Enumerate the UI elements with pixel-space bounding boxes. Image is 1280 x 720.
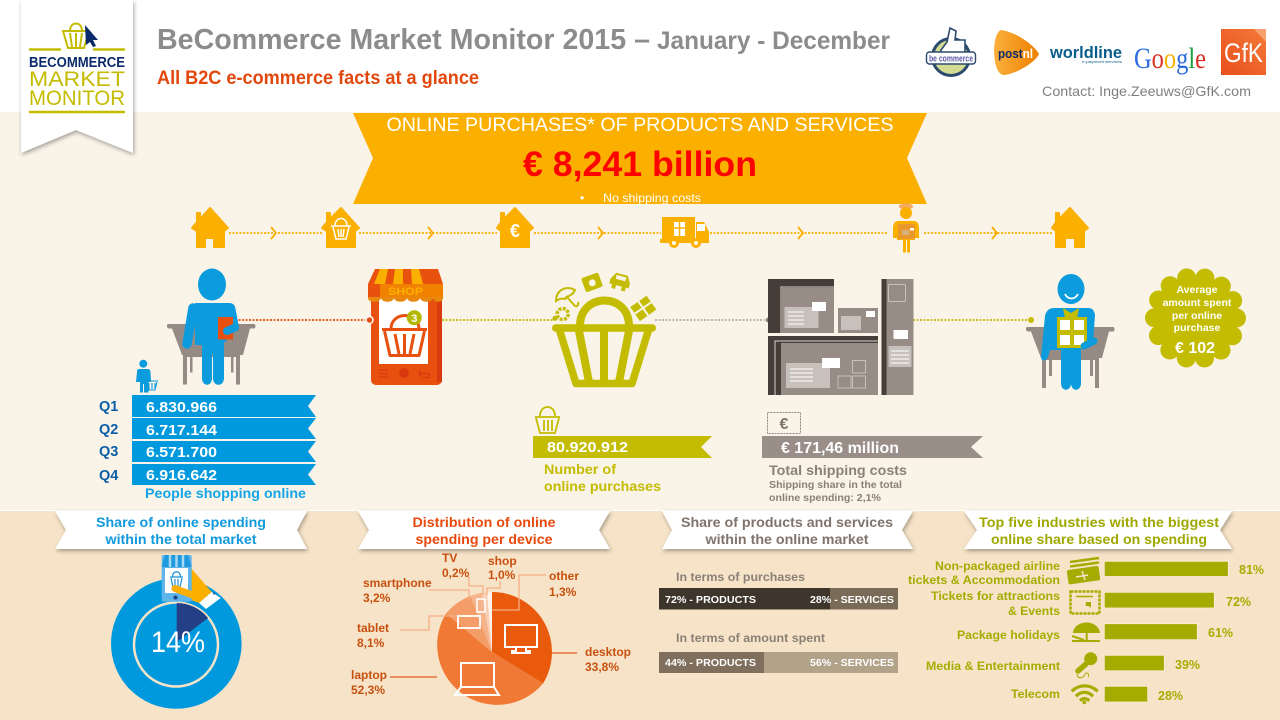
bar: amount spent [659,631,898,673]
badge: average amount spent: per online [1172,310,1222,322]
industry labels: Telecom [1011,687,1060,701]
headline banner: • [580,191,584,205]
logo: google: Google [1134,42,1206,75]
icon: home with basket [322,208,359,247]
industry labels: Tickets for attractions [931,589,1060,603]
quarterly shoppers bars: Q2 [99,422,118,438]
stat: total shipping costs: online spending: 2,1% [769,492,882,504]
pie labels: 1,3% [549,585,577,599]
bar: amount spent: 56% - SERVICES [810,657,894,669]
pie labels: 33,8% [585,660,619,674]
title [157,24,890,56]
logo: be commerce: be commerce [929,54,973,64]
icon: event ticket [1070,592,1100,614]
badge: average amount spent: purchase [1174,322,1221,334]
percent values: 72% [1226,595,1251,609]
contact: Contact: Inge.Zeeuws@GfK.com [1042,83,1251,99]
panel: products and services [659,511,913,673]
bar: purchases [659,570,898,610]
logo: gfk: GfK [1224,38,1263,68]
heading ribbon: Share of products and services [681,514,893,530]
bar: purchases: In terms of purchases [676,570,805,584]
panel: top five industries [908,511,1264,704]
bar: amount spent: In terms of amount spent [676,631,825,645]
heading ribbon [964,511,1232,549]
logo: postnl [994,30,1039,75]
heading ribbon: Share of online spending [96,514,266,530]
headline banner: ONLINE PURCHASES* OF PRODUCTS AND SERVICES [386,115,894,136]
donut chart [111,578,242,709]
title: January - December [657,27,890,55]
figure: happy customer with parcel [1026,274,1114,390]
stat: number of online purchases: online purchases [544,478,661,494]
process dotted connectors [235,319,1030,321]
icon: camera [581,272,603,293]
icon: beach umbrella [1072,622,1100,641]
logo: postnl: postnl [998,47,1033,61]
pie labels: laptop [351,668,387,682]
icon: delivery truck [660,217,709,248]
panel: distribution per device [351,511,631,705]
figure: shop smartphone [366,269,443,385]
icon: courier [893,204,919,252]
bar chart [1104,561,1228,702]
icon: wifi [1072,686,1098,704]
icon: car [608,272,632,292]
icon: tablet [458,616,480,628]
stat: total shipping costs: € 171,46 million [781,440,899,457]
icon: airline tickets [1067,558,1100,585]
quarterly shoppers bars: Q1 [99,399,118,415]
logo: be commerce [926,28,976,76]
industry labels [908,559,1060,701]
pie labels: 0,2% [442,566,470,580]
badge: average amount spent: € 102 [1175,340,1215,357]
figure: shop smartphone: 3 [411,313,417,325]
pie labels: smartphone [363,576,432,590]
logo ribbon: BECOMMERCE [29,55,125,71]
industry labels: & Events [1008,604,1060,618]
heading ribbon: Top five industries with the biggest [979,514,1219,530]
figure: product basket [552,272,656,384]
pie labels: other [549,569,579,583]
quarterly shoppers bars: 6.916.642 [146,467,217,484]
donut chart: 14% [151,626,205,659]
figure: online shopper [167,268,256,385]
icon: desktop [505,625,537,653]
quarterly shoppers bars: Q3 [99,444,118,460]
icon: laptop [455,663,499,695]
small shopper icon [136,360,158,392]
logo ribbon [21,0,133,153]
heading ribbon [358,511,610,549]
awning: SHOP [388,286,423,298]
logo: worldline: e-payment services [1082,59,1122,64]
headline banner: € 8,241 billion [523,145,757,184]
pie labels: 52,3% [351,683,385,697]
industry labels: tickets & Accommodation [908,573,1060,587]
quarterly shoppers bars: People shopping online [145,485,306,501]
bar: purchases: 28% - SERVICES [810,594,894,606]
figure: parcels [768,279,914,395]
quarterly shoppers bars [99,395,316,501]
process connector end dots [765,317,771,323]
percent values [1158,563,1264,703]
heading ribbon: spending per device [416,531,553,547]
badge: average amount spent [1154,276,1238,360]
heading ribbon: within the total market [104,531,257,547]
heading ribbon: within the online market [704,531,869,547]
headline banner: No shipping costs [603,191,701,205]
bar: purchases: 72% - PRODUCTS [665,594,756,606]
icon: hand holding phone [162,555,221,609]
industry labels: Media & Entertainment [926,659,1060,673]
pie labels: TV [442,551,457,565]
percent values: 81% [1239,563,1264,577]
icon: gift [629,294,656,321]
stat: total shipping costs: Shipping share in the total [769,479,902,491]
logo ribbon: MONITOR [29,87,125,110]
journey icons and dotted arrows [192,204,1088,252]
leader lines [400,575,546,630]
percent values: 61% [1208,626,1233,640]
pie labels [351,551,631,697]
stat: total shipping costs: € [780,416,789,433]
pie labels: tablet [357,621,389,635]
stat: total shipping costs [762,412,983,504]
quarterly shoppers bars: 6.717.144 [146,422,218,439]
stat: number of online purchases: 80.920.912 [547,439,628,456]
pie labels: 1,0% [488,568,516,582]
icon: home [192,208,228,247]
heading ribbon: online share based on spending [991,531,1207,547]
stat: number of online purchases [533,407,712,494]
pie labels: 8,1% [357,636,385,650]
icon: flower [552,308,568,321]
icon: home destination [1052,208,1088,247]
quarterly shoppers bars: Q4 [99,468,118,484]
quarterly shoppers bars: 6.830.966 [146,399,217,416]
percent values: 28% [1158,689,1183,703]
stat: total shipping costs: Total shipping costs [769,462,907,478]
icon: microphone [1077,652,1097,678]
heading ribbon [662,511,913,549]
icon: home with euro [497,208,533,247]
bar: amount spent: 44% - PRODUCTS [665,657,756,669]
heading ribbon [55,511,307,549]
pie chart [437,592,552,705]
stat: number of online purchases: Number of [544,461,616,477]
badge: average amount spent: amount spent [1163,297,1232,309]
icon: smartphone [477,599,485,612]
panel: share of online spending [55,511,307,709]
industry labels: Non-packaged airline [935,559,1060,573]
icon: umbrella [556,288,578,306]
partner logos [926,28,1266,76]
icon: home with euro: € [510,221,520,241]
headline banner [353,113,927,205]
pie labels: shop [488,554,517,568]
logo ribbon: MARKET [29,68,125,91]
pie labels: desktop [585,645,631,659]
subtitle: All B2C e-commerce facts at a glance [157,68,479,89]
industry labels: Package holidays [957,628,1060,642]
badge: average amount spent: Average [1176,284,1218,296]
heading ribbon: Distribution of online [412,514,556,530]
quarterly shoppers bars: 6.571.700 [146,444,217,461]
title: BeCommerce Market Monitor 2015 – [157,24,650,56]
percent values: 39% [1175,658,1200,672]
pie labels: 3,2% [363,591,391,605]
logo: worldline: worldline [1049,43,1122,62]
logo: gfk [1221,29,1266,75]
